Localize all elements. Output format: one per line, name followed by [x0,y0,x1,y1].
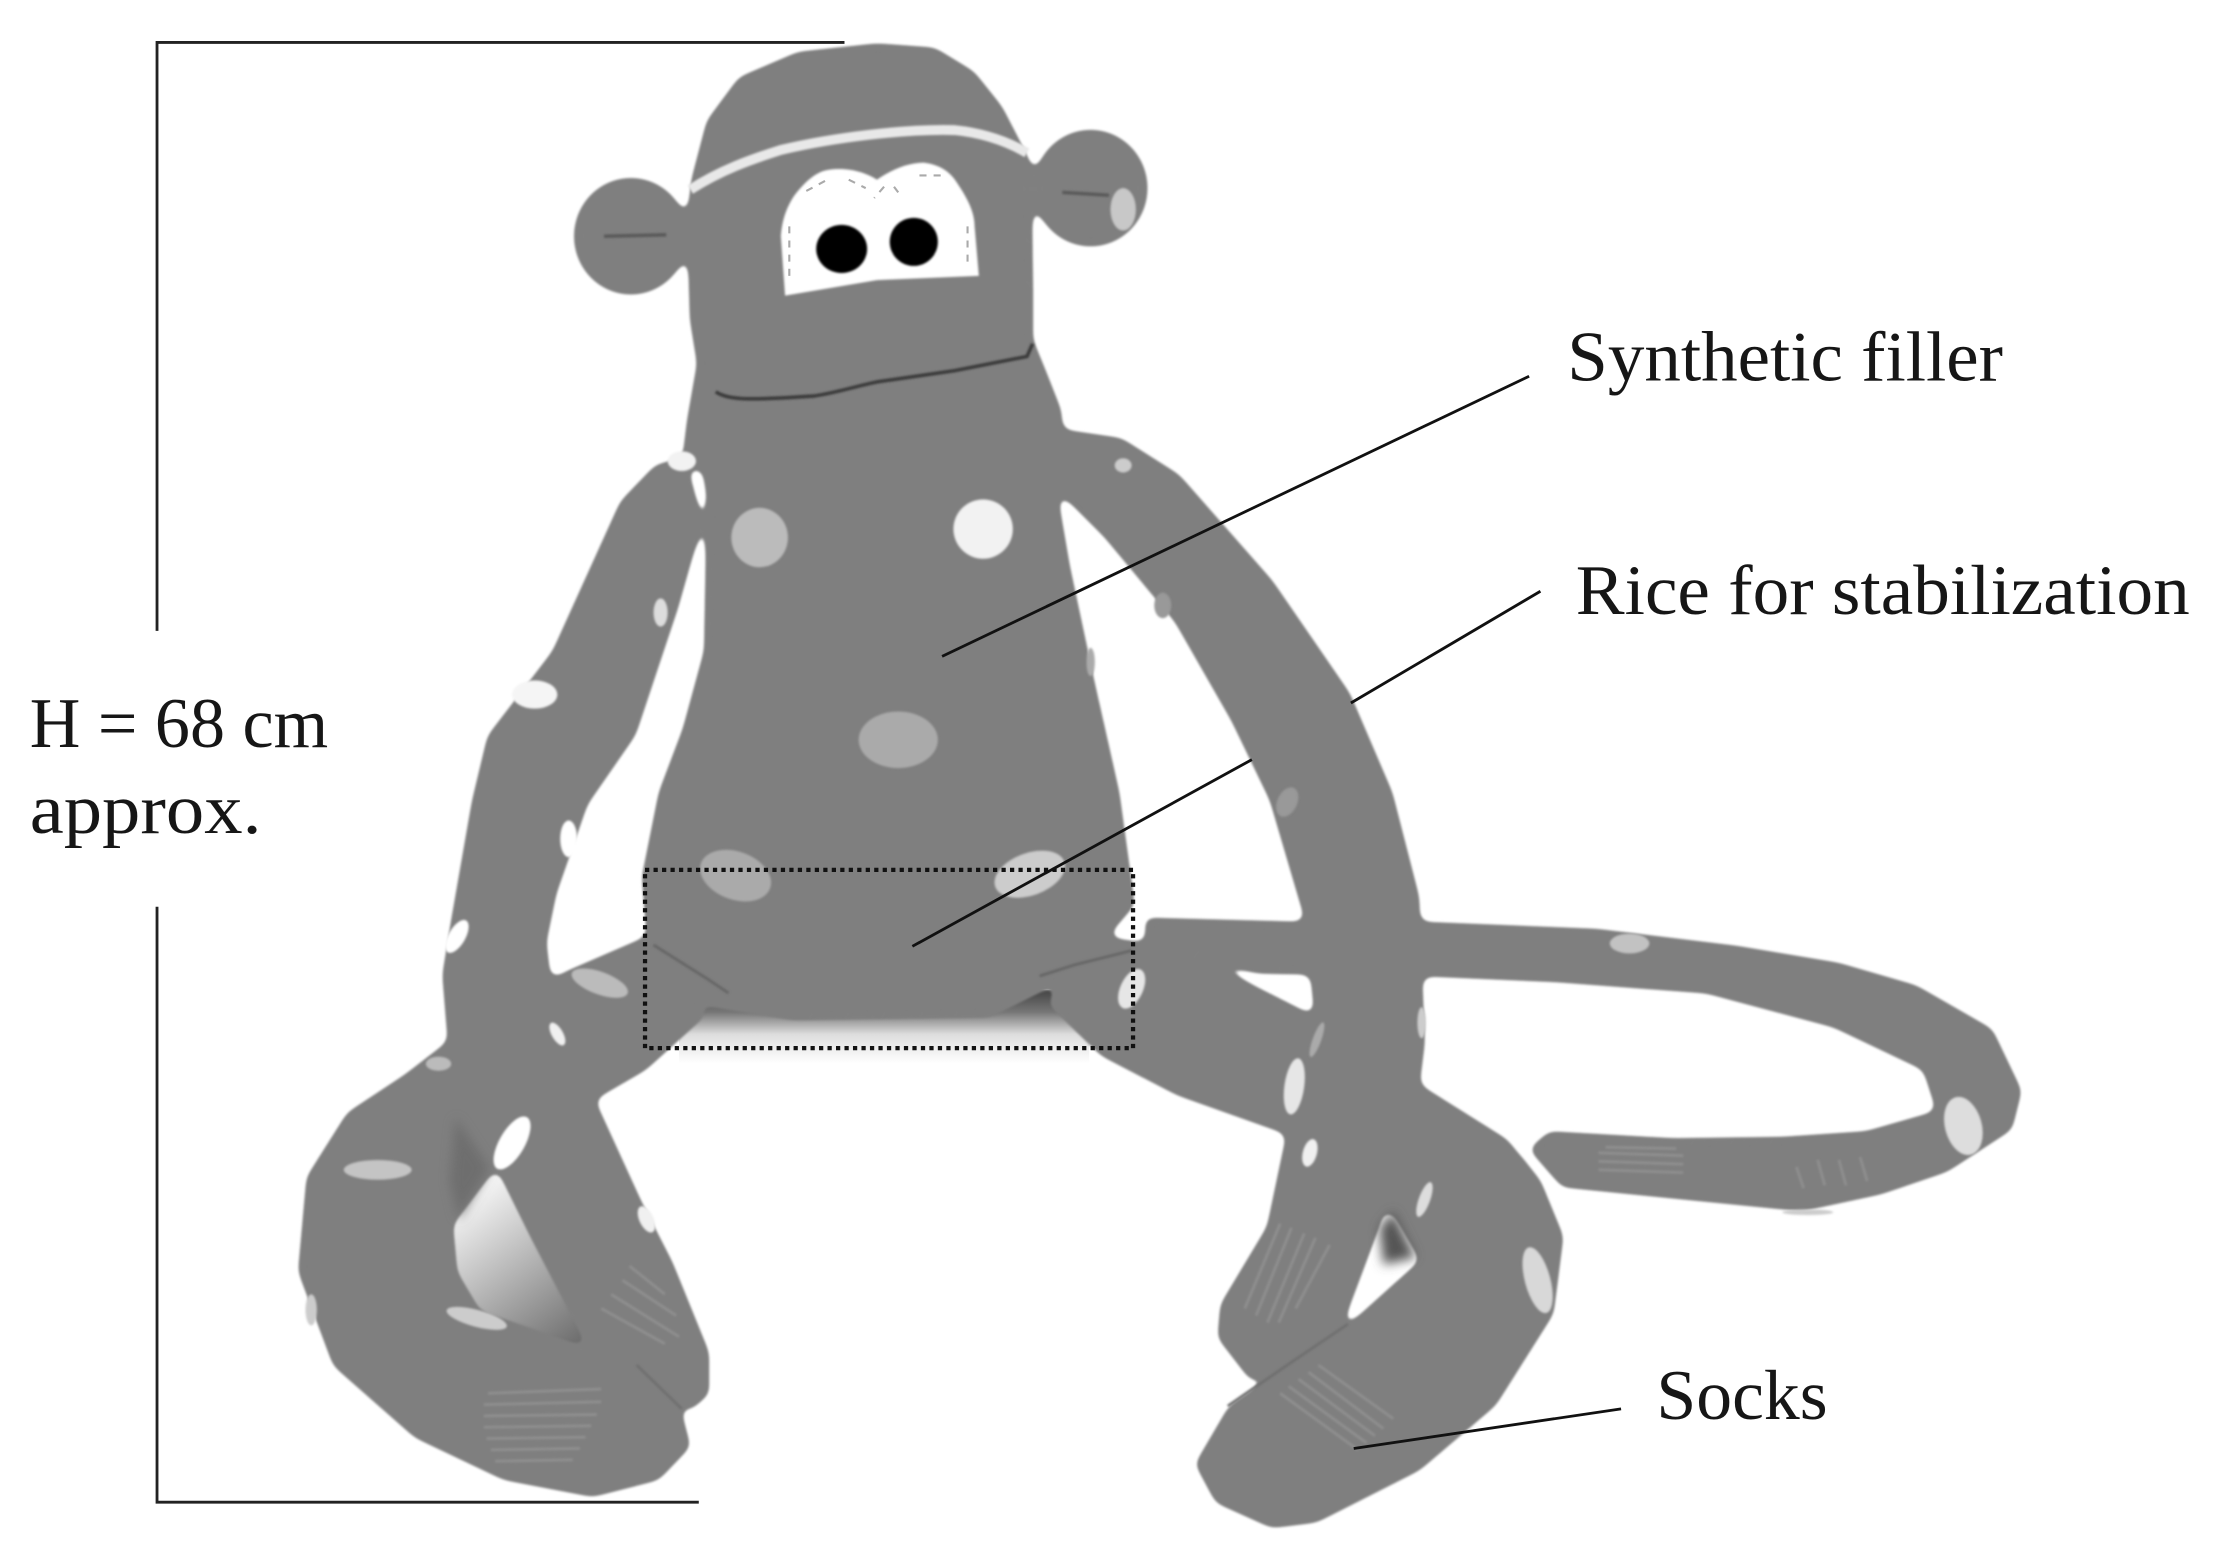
leader line: socks [1354,1409,1621,1448]
right arm [1054,427,1426,1382]
hand and foot creases [637,1324,1348,1409]
head [680,42,1068,498]
sock monkey [297,42,2023,1529]
shadow between arm and right leg [1379,1211,1416,1265]
leader line: rice [912,591,1540,946]
mouth [716,344,1033,399]
tail [1144,917,2023,1212]
label: synthetic filler: Synthetic filler [1567,319,2003,397]
right ear [1033,129,1149,248]
polka dots [306,188,1989,1335]
left arm [441,455,710,1412]
left leg [297,934,707,1498]
floor shadow under body [679,990,1089,1064]
shadow gap in left leg loop [441,1153,608,1365]
body [641,424,1136,1021]
label: socks: Socks [1656,1357,1828,1435]
label: rice for stabilization: Rice for stabilization [1576,552,2190,630]
label: approx: approx. [30,771,262,849]
right eye [890,218,938,266]
patch stitching [789,175,968,276]
leader line: synthetic filler [942,376,1529,656]
right leg [1047,934,1564,1529]
sock ribbing texture [484,1147,1867,1461]
ear slits [604,192,1109,236]
eye patch [781,163,979,296]
leg shading [450,1117,489,1219]
left ear [573,177,689,296]
left eye [816,225,867,273]
monkey silhouette [297,42,2023,1529]
head stripe [690,130,1027,190]
height bracket [157,42,844,1502]
rice region dotted box [645,870,1133,1048]
crotch creases [654,945,1132,993]
label: height: H = 68 cm [30,685,328,763]
